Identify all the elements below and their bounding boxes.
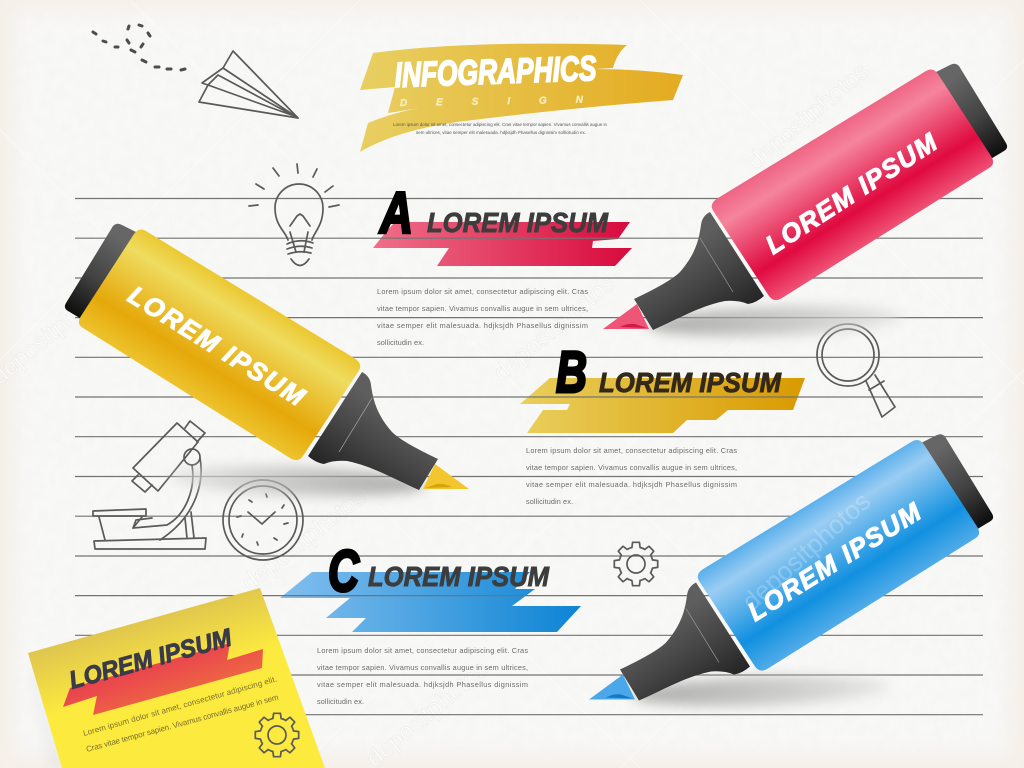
section B xyxy=(526,340,782,506)
title description: sem ultrices, vitae semper elit malesuada. hdjksjdh Phasellus dignissim sollicitudin ex. xyxy=(416,130,586,135)
heading B: LOREM IPSUM xyxy=(599,367,782,398)
yellow marker xyxy=(65,224,469,499)
doodle: light bulb xyxy=(249,164,339,266)
banner C xyxy=(280,572,581,632)
note text: Lorem ipsum dolor sit amet, consectetur adipiscing elit. xyxy=(82,675,278,738)
note heading: LOREM IPSUM xyxy=(66,623,236,695)
blue marker xyxy=(589,434,993,709)
heading A: LOREM IPSUM xyxy=(427,207,609,238)
text block C: vitae semper elit malesuada. hdjksjdh Phasellus dignissim xyxy=(317,680,528,689)
heading C: LOREM IPSUM xyxy=(368,561,550,592)
blue marker watermark: depositphotos xyxy=(736,486,876,616)
yellow marker label: LOREM IPSUM xyxy=(123,280,311,413)
watermark text: depositphotos xyxy=(237,483,371,597)
title description xyxy=(393,122,607,135)
watermark text: depositphotos xyxy=(489,270,620,387)
heading: infographics: INFOGRAPHICS xyxy=(394,49,597,95)
text block A xyxy=(377,287,588,347)
banner A xyxy=(373,222,632,266)
red marker label: LOREM IPSUM xyxy=(760,126,943,260)
red marker xyxy=(603,64,1007,339)
letter C: C xyxy=(328,539,360,604)
text block A: sollicitudin ex. xyxy=(377,338,424,347)
text block B: vitae tempor sapien. Vivamus convallis augue in sem ultrices, xyxy=(526,463,737,472)
doodle: gear xyxy=(614,542,658,586)
banner B xyxy=(520,378,805,433)
section C xyxy=(317,539,550,706)
text block A: vitae tempor sapien. Vivamus convallis augue in sem ultrices, xyxy=(377,304,588,313)
blue marker label: LOREM IPSUM xyxy=(742,496,927,627)
text block B xyxy=(526,446,737,506)
heading: design: D E S I G N xyxy=(400,95,584,109)
letter A: A xyxy=(378,181,413,246)
doodle: magnifier xyxy=(817,324,895,417)
text block C: Lorem ipsum dolor sit amet, consectetur adipiscing elit. Cras xyxy=(317,646,528,655)
letter B: B xyxy=(556,340,587,405)
title xyxy=(393,49,607,135)
icon: note gear xyxy=(255,713,299,757)
text block C: sollicitudin ex. xyxy=(317,697,364,706)
note text: Cras vitae tempor sapien. Vivamus convallis augue in sem xyxy=(85,693,280,754)
doodle: microscope xyxy=(93,421,206,549)
text block C xyxy=(317,646,528,706)
text block B: sollicitudin ex. xyxy=(526,497,573,506)
yellow marker barrel xyxy=(65,224,469,499)
text block C: vitae tempor sapien. Vivamus convallis augue in sem ultrices, xyxy=(317,663,528,672)
doodle: paper plane xyxy=(199,51,298,118)
note red banner xyxy=(63,643,263,715)
text block A: vitae semper elit malesuada. hdjksjdh Phasellus dignissim xyxy=(377,321,588,330)
sticky note xyxy=(28,588,325,768)
doodle: clock xyxy=(223,480,303,560)
title description: Lorem ipsum dolor sit amet, consectetur adipiscing elit. Cras vitae tempor sapien. Vivamus convallis augue in xyxy=(393,122,607,127)
text block A: Lorem ipsum dolor sit amet, consectetur adipiscing elit. Cras xyxy=(377,287,588,296)
text block B: Lorem ipsum dolor sit amet, consectetur adipiscing elit. Cras xyxy=(526,446,737,455)
doodle: dotted flight trail xyxy=(93,25,185,70)
title brush banner xyxy=(360,44,683,152)
watermark text xyxy=(0,58,874,768)
watermark text: depositphotos xyxy=(743,58,874,175)
ruled notebook lines xyxy=(75,198,983,715)
text block B: vitae semper elit malesuada. hdjksjdh Phasellus dignissim xyxy=(526,480,737,489)
section A xyxy=(377,181,609,347)
